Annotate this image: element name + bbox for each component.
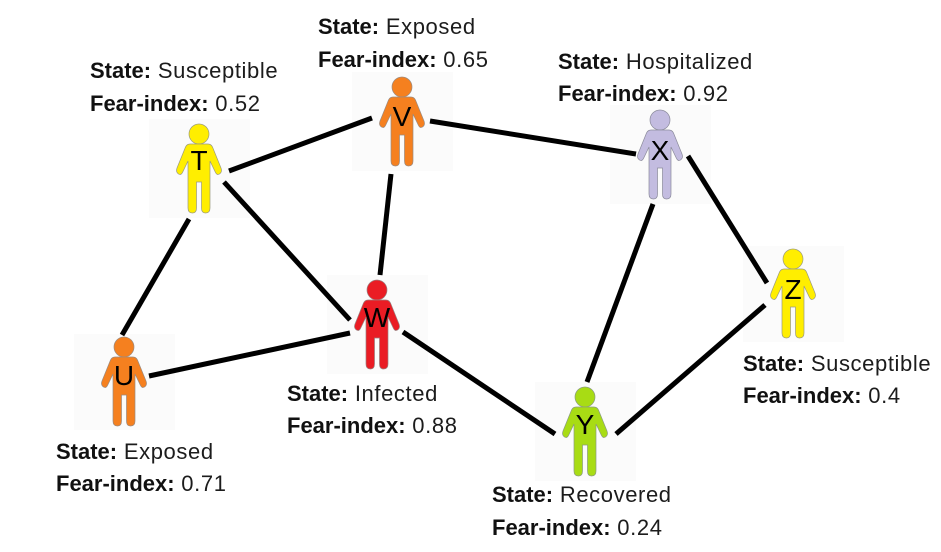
background tile: T <box>149 119 250 218</box>
label U: State: <box>56 439 117 464</box>
label Z: State: <box>743 351 804 376</box>
label Z: Susceptible <box>811 351 931 376</box>
person T: Susceptible <box>176 124 222 213</box>
background tile: U <box>74 334 175 430</box>
label X: State: <box>558 49 619 74</box>
label W: 0.88 <box>412 413 458 438</box>
link: W to Y <box>403 332 555 434</box>
background tile: X <box>610 105 711 204</box>
background tile: Z <box>743 246 844 342</box>
person W: Infected <box>354 280 400 369</box>
link: U to W <box>149 333 350 376</box>
person U: Exposed: U <box>114 360 134 391</box>
label U: Exposed <box>124 439 214 464</box>
label V: Exposed <box>386 14 476 39</box>
label T: 0.52 <box>215 91 261 116</box>
label V: State: <box>318 14 379 39</box>
person Z: Susceptible <box>770 249 816 338</box>
person Y: Recovered <box>562 387 608 476</box>
label Y: 0.24 <box>617 515 663 540</box>
person Y: Recovered: Y <box>576 409 595 440</box>
label X: Fear-index: <box>558 81 677 106</box>
label W: State: <box>287 381 348 406</box>
label Z: Fear-index: <box>743 383 862 408</box>
label T: Susceptible <box>158 58 278 83</box>
person V: Exposed: V <box>393 101 412 132</box>
background tile: W <box>327 275 428 374</box>
label T: State: <box>90 58 151 83</box>
person U: Exposed <box>102 337 146 426</box>
label X: Hospitalized <box>626 49 753 74</box>
link: T to W <box>224 182 350 320</box>
label V: Fear-index: <box>318 47 437 72</box>
link: T to U <box>122 219 189 335</box>
person X: Hospitalized: X <box>651 135 670 166</box>
background tile: Y <box>535 382 636 481</box>
label W: Infected <box>355 381 438 406</box>
label Y: State: <box>492 482 553 507</box>
link: V to X <box>430 121 636 154</box>
link: X to Z <box>688 156 767 283</box>
label U: Fear-index: <box>56 471 175 496</box>
label X: 0.92 <box>683 81 729 106</box>
person W: Infected: W <box>364 302 391 333</box>
link: V to W <box>380 174 391 275</box>
label U: 0.71 <box>181 471 227 496</box>
label Y: Recovered <box>560 482 672 507</box>
label V: 0.65 <box>443 47 489 72</box>
person Z: Susceptible: Z <box>784 274 802 305</box>
label T: Fear-index: <box>90 91 209 116</box>
link: X to Y <box>587 204 653 382</box>
background tile: V <box>352 72 453 171</box>
label W: Fear-index: <box>287 413 406 438</box>
label Y: Fear-index: <box>492 515 611 540</box>
person V: Exposed <box>380 77 424 166</box>
link: Y to Z <box>616 305 765 434</box>
person T: Susceptible: T <box>190 145 208 176</box>
link: T to V <box>229 118 372 171</box>
person X: Hospitalized <box>638 110 682 199</box>
label Z: 0.4 <box>868 383 901 408</box>
